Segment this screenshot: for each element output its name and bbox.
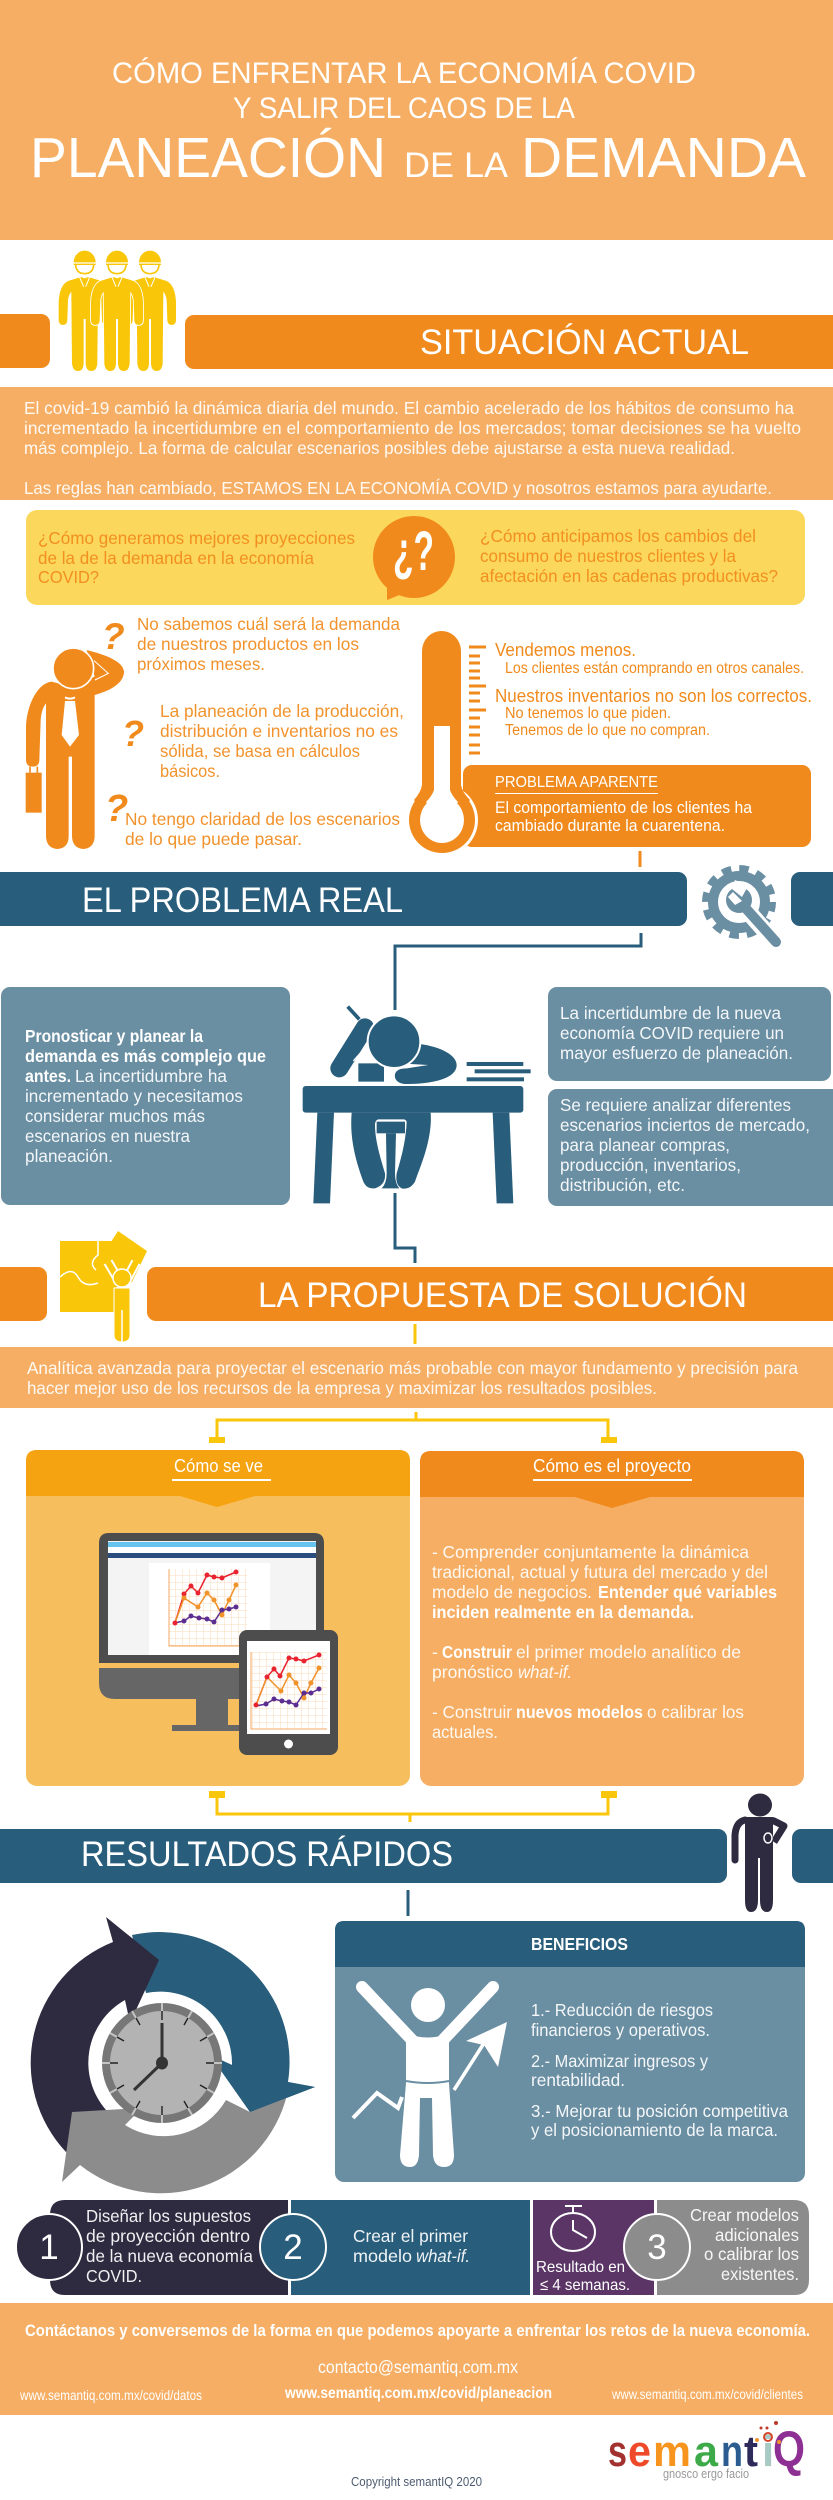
step 1: de la nueva economía xyxy=(86,2246,253,2266)
section header: resultados rápidos: RESULTADOS RÁPIDOS xyxy=(81,1835,453,1874)
text: uncertainty statements: de nuestros productos en los xyxy=(137,634,359,654)
step 2 xyxy=(291,2200,530,2295)
section header: la propuesta de solución xyxy=(0,1267,833,1321)
title banner: Y SALIR DEL CAOS DE LA xyxy=(233,92,575,125)
step 3: o calibrar los xyxy=(704,2244,799,2264)
text: uncertainty statements: básicos. xyxy=(160,761,220,781)
text: uncertainty statements xyxy=(125,614,404,849)
section header: el problema real xyxy=(0,872,833,926)
section header: resultados rápidos xyxy=(0,1829,833,1883)
analytics text band: hacer mejor uso de los recursos de la empresa y maximizar los resultados posibles. xyxy=(27,1378,657,1398)
text: symptoms xyxy=(495,640,812,739)
panel: cómo es el proyecto: - Construir xyxy=(432,1702,512,1722)
panel: cómo es el proyecto: nuevos modelos xyxy=(516,1702,643,1722)
panel: cómo es el proyecto: Cómo es el proyecto xyxy=(533,1456,691,1476)
footer contact band: www.semantiq.com.mx/covid/datos xyxy=(19,2388,202,2403)
panel: questions xyxy=(26,510,805,605)
result chip: 4 weeks xyxy=(533,2200,654,2295)
analytics text band: Analítica avanzada para proyectar el escenario más probable con mayor fundamento y precisión para xyxy=(27,1358,798,1378)
step number badges: 1 xyxy=(39,2228,59,2267)
panel: pronosticar: planeación. xyxy=(25,1146,113,1166)
icon: puzzle with person xyxy=(60,1231,147,1342)
text: uncertainty statements: sólida, se basa en cálculos xyxy=(160,741,360,761)
icon: clock with cycle arrows xyxy=(31,1917,315,2193)
step 3: existentes. xyxy=(721,2264,799,2284)
step 2: what-if. xyxy=(416,2246,470,2266)
icon: speech bubble: ¿? xyxy=(393,519,434,582)
title banner xyxy=(0,0,833,240)
footer contact band xyxy=(0,2303,833,2415)
logo: semantiQ: a xyxy=(694,2427,719,2476)
icon: man checking watch xyxy=(735,1794,784,1912)
footer contact band: www.semantiq.com.mx/covid/planeacion xyxy=(284,2385,552,2402)
panel: cómo es el proyecto: Construir xyxy=(442,1642,512,1662)
panel: pronosticar: escenarios en nuestra xyxy=(25,1126,190,1146)
panel: beneficios: BENEFICIOS xyxy=(531,1934,628,1954)
panel: cómo es el proyecto: el primer modelo analítico de xyxy=(516,1642,741,1662)
text: uncertainty statements: No tengo claridad de los escenarios xyxy=(125,809,400,829)
panel: beneficios: 1.- Reducción de riesgos xyxy=(531,2000,713,2020)
panel: problema aparente: cambiado durante la cuarentena. xyxy=(495,816,725,835)
section header: situación actual xyxy=(0,314,833,369)
panel: escenarios xyxy=(548,1089,833,1206)
icon: stopwatch xyxy=(551,2206,595,2251)
panel: questions: consumo de nuestros clientes y la xyxy=(480,546,736,566)
icon: celebrating person with rising arrow xyxy=(353,1987,507,2167)
step 1: COVID. xyxy=(86,2266,142,2286)
intro text band: Las reglas han cambiado, ESTAMOS EN LA ECONOMÍA COVID y nosotros estamos para ayudarte. xyxy=(24,478,772,498)
panel: beneficios: 2.- Maximizar ingresos y xyxy=(531,2051,708,2071)
clock face xyxy=(102,2003,222,2123)
panel: cómo se ve xyxy=(26,1450,410,1786)
icon: desktop monitor with chart xyxy=(99,1533,324,1731)
icon: thermometer xyxy=(406,631,486,856)
step 2: Crear el primer xyxy=(353,2226,468,2246)
step 1: Diseñar los supuestos xyxy=(86,2206,251,2226)
panel: questions: ¿Cómo generamos mejores proyecciones xyxy=(38,528,355,548)
panel: problema aparente: PROBLEMA APARENTE xyxy=(495,774,658,791)
intro text band xyxy=(0,387,833,500)
step 3: Crear modelos xyxy=(690,2205,799,2225)
logo: semantiQ: n xyxy=(721,2427,743,2476)
panel: beneficios: financieros y operativos. xyxy=(531,2020,710,2040)
logo: semantiQ: t xyxy=(744,2427,758,2476)
icon: gear and wrench xyxy=(706,868,782,950)
panel: pronosticar: considerar muchos más xyxy=(25,1106,205,1126)
panel: beneficios xyxy=(335,1921,805,2182)
text: uncertainty statements: distribución e inventarios no es xyxy=(160,721,398,741)
panel: cómo es el proyecto xyxy=(420,1451,804,1786)
panel: beneficios: 3.- Mejorar tu posición competitiva xyxy=(531,2101,788,2121)
panel: questions: ¿Cómo anticipamos los cambios del xyxy=(480,526,756,546)
panel: cómo es el proyecto: inciden realmente en la demanda. xyxy=(432,1602,694,1622)
panel: cómo es el proyecto: modelo de negocios. xyxy=(432,1582,592,1602)
panel: cómo es el proyecto: actuales. xyxy=(432,1722,498,1742)
panel: questions: de la de la demanda en la economía xyxy=(38,548,314,568)
panel: incertidumbre xyxy=(548,987,831,1081)
panel: problema aparente xyxy=(463,765,811,847)
panel: cómo es el proyecto: tradicional, actual y futura del mercado y del xyxy=(432,1562,768,1582)
title banner: PLANEACIÓN xyxy=(30,126,386,190)
panel: beneficios: y el posicionamiento de la marca. xyxy=(531,2120,778,2140)
logo: semantiQ: s xyxy=(608,2427,627,2476)
panel: cómo es el proyecto: - xyxy=(432,1642,438,1662)
text: uncertainty statements: No sabemos cuál será la demanda xyxy=(137,614,400,634)
footer contact band: contacto@semantiq.com.mx xyxy=(318,2357,518,2377)
intro text band: El covid-19 cambió la dinámica diaria del mundo. El cambio acelerado de los hábitos de consumo ha xyxy=(24,398,794,418)
text: uncertainty statements: próximos meses. xyxy=(137,654,265,674)
panel: cómo es el proyecto: what-if. xyxy=(518,1662,572,1682)
intro text band: incrementado la incertidumbre en el comportamiento de los mercados; tomar decisiones se ha vuelto xyxy=(24,418,801,438)
title banner: CÓMO ENFRENTAR LA ECONOMÍA COVID xyxy=(112,57,696,90)
title banner: DEMANDA xyxy=(521,126,806,190)
panel: problema aparente: El comportamiento de los clientes ha xyxy=(495,798,753,817)
panel: cómo es el proyecto: o calibrar los xyxy=(647,1702,744,1722)
panel: cómo es el proyecto: - Comprender conjuntamente la dinámica xyxy=(432,1542,749,1562)
section header: el problema real: EL PROBLEMA REAL xyxy=(82,881,403,920)
panel: questions: afectación en las cadenas productivas? xyxy=(480,566,778,586)
text: symptoms: Nuestros inventarios no son los correctos. xyxy=(495,686,812,706)
panel: escenarios: para planear compras, xyxy=(560,1135,730,1155)
panel: pronosticar: antes. xyxy=(25,1066,71,1086)
panel: escenarios: escenarios inciertos de mercado, xyxy=(560,1115,810,1135)
panel: pronosticar: incrementado y necesitamos xyxy=(25,1086,243,1106)
icon: tablet with chart xyxy=(239,1630,338,1755)
result chip: 4 weeks: ≤ 4 semanas. xyxy=(540,2277,630,2294)
logo: semantiQ: i xyxy=(762,2427,774,2476)
panel: questions: COVID? xyxy=(38,567,99,587)
icon: speech bubble xyxy=(373,516,455,600)
step number badges xyxy=(16,2214,690,2280)
copyright: Copyright semantIQ 2020 xyxy=(351,2474,482,2489)
step 2: modelo xyxy=(353,2246,412,2266)
analytics text band xyxy=(0,1347,833,1408)
text: symptoms: No tenemos lo que piden. xyxy=(505,705,671,722)
logo: semantiQ: gnosco ergo facio xyxy=(663,2466,749,2481)
footer contact band: www.semantiq.com.mx/covid/clientes xyxy=(611,2387,803,2402)
panel: pronosticar xyxy=(1,987,290,1205)
panel: escenarios: Se requiere analizar diferentes xyxy=(560,1095,791,1115)
panel: cómo es el proyecto: Entender qué variables xyxy=(598,1582,777,1602)
step 1 xyxy=(50,2200,288,2295)
step 3: adicionales xyxy=(715,2225,799,2245)
icon: confused businessman: ? xyxy=(102,616,125,657)
panel: pronosticar: demanda es más complejo que xyxy=(25,1046,266,1066)
text: uncertainty statements: La planeación de la producción, xyxy=(160,701,404,721)
panel: incertidumbre: mayor esfuerzo de planeación. xyxy=(560,1043,793,1063)
step 1: de proyección dentro xyxy=(86,2226,250,2246)
icon: confused businessman: ? xyxy=(122,713,144,754)
logo: semantiQ: Q xyxy=(773,2421,805,2477)
title banner: DE LA xyxy=(404,146,509,185)
icon: confused businessman xyxy=(26,616,144,849)
text: uncertainty statements: de lo que puede pasar. xyxy=(125,829,302,849)
panel: beneficios: rentabilidad. xyxy=(531,2070,625,2090)
panel: escenarios: producción, inventarios, xyxy=(560,1155,741,1175)
logo: semantiQ xyxy=(608,2421,805,2481)
panel: cómo se ve: Cómo se ve xyxy=(174,1456,263,1476)
icon: confused businessman: ? xyxy=(105,788,128,830)
panel: cómo es el proyecto: pronóstico xyxy=(432,1662,513,1682)
text: symptoms: Tenemos de lo que no compran. xyxy=(505,722,710,739)
icon: three workers with helmets and masks xyxy=(59,251,176,371)
step 3 xyxy=(657,2200,809,2295)
text: symptoms: Vendemos menos. xyxy=(495,640,636,660)
intro text band: más complejo. La forma de calcular escenarios posibles debe ajustarse a esta nueva realidad. xyxy=(24,438,735,458)
result chip: 4 weeks: Resultado en xyxy=(536,2259,625,2276)
step number badges: 3 xyxy=(647,2228,667,2267)
panel: pronosticar: La incertidumbre ha xyxy=(75,1066,227,1086)
logo: semantiQ: m xyxy=(653,2427,691,2476)
text: symptoms: Los clientes están comprando en otros canales. xyxy=(505,660,804,677)
step number badges: 2 xyxy=(283,2228,303,2267)
panel: pronosticar: Pronosticar y planear la xyxy=(25,1026,203,1046)
icon: exhausted person at desk xyxy=(303,1007,531,1203)
panel: escenarios: distribución, etc. xyxy=(560,1175,685,1195)
section header: la propuesta de solución: LA PROPUESTA DE SOLUCIÓN xyxy=(258,1276,747,1315)
logo: semantiQ: e xyxy=(628,2427,651,2476)
panel: incertidumbre: economía COVID requiere un xyxy=(560,1023,784,1043)
panel: incertidumbre: La incertidumbre de la nueva xyxy=(560,1003,781,1023)
section header: situación actual: SITUACIÓN ACTUAL xyxy=(420,323,749,362)
